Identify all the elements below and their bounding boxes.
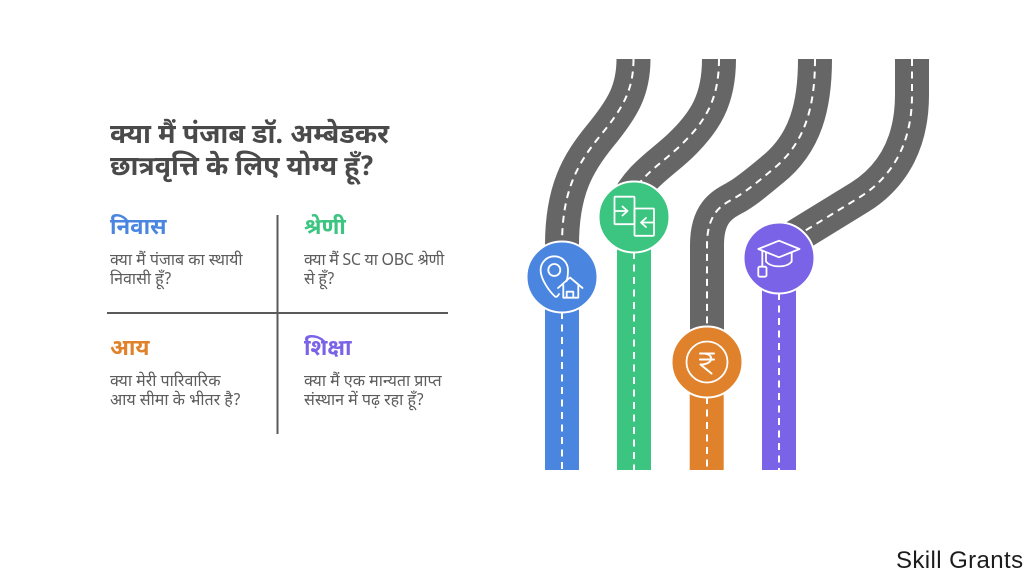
- panel: category text: से हूँ?: [304, 270, 335, 291]
- panel: education text: संस्थान में पढ़ रहा हूँ?: [304, 391, 424, 412]
- panel: residence text: क्या मैं पंजाब का स्थायी: [110, 251, 243, 272]
- brand label: Skill Grants: [896, 547, 1024, 574]
- panel: residence text: निवासी हूँ?: [110, 270, 172, 291]
- panel: income text: आय सीमा के भीतर है?: [110, 391, 241, 412]
- icon: rupee: [672, 326, 742, 398]
- icon: location pin and house: [526, 242, 598, 312]
- road 1 blue: [545, 59, 634, 470]
- title: क्या मैं पंजाब डॉ. अम्बेडकर: [110, 120, 389, 155]
- title: [110, 118, 390, 187]
- panel: education heading: शिक्षा: [304, 336, 352, 365]
- panel: education text: क्या मैं एक मान्यता प्राप्त: [304, 372, 442, 393]
- panel: income text: क्या मेरी पारिवारिक: [110, 372, 220, 393]
- road 4 purple: [762, 59, 912, 470]
- panel: residence heading: निवास: [110, 215, 166, 244]
- panel: category heading: श्रेणी: [304, 215, 346, 244]
- road 3 orange: [690, 59, 815, 470]
- panel: education text: [304, 372, 442, 412]
- panel: category text: क्या मैं SC या OBC श्रेणी: [304, 251, 444, 272]
- panel: residence text: [110, 250, 243, 291]
- title: छात्रवृत्ति के लिए योग्य हूँ?: [110, 152, 374, 187]
- icon: swap arrows: [598, 182, 670, 252]
- panel: income heading: आय: [110, 336, 150, 365]
- icon: graduation cap: [744, 222, 814, 294]
- road 2 green: [617, 59, 719, 470]
- panel: income text: [110, 372, 241, 412]
- panel: category text: [304, 250, 444, 291]
